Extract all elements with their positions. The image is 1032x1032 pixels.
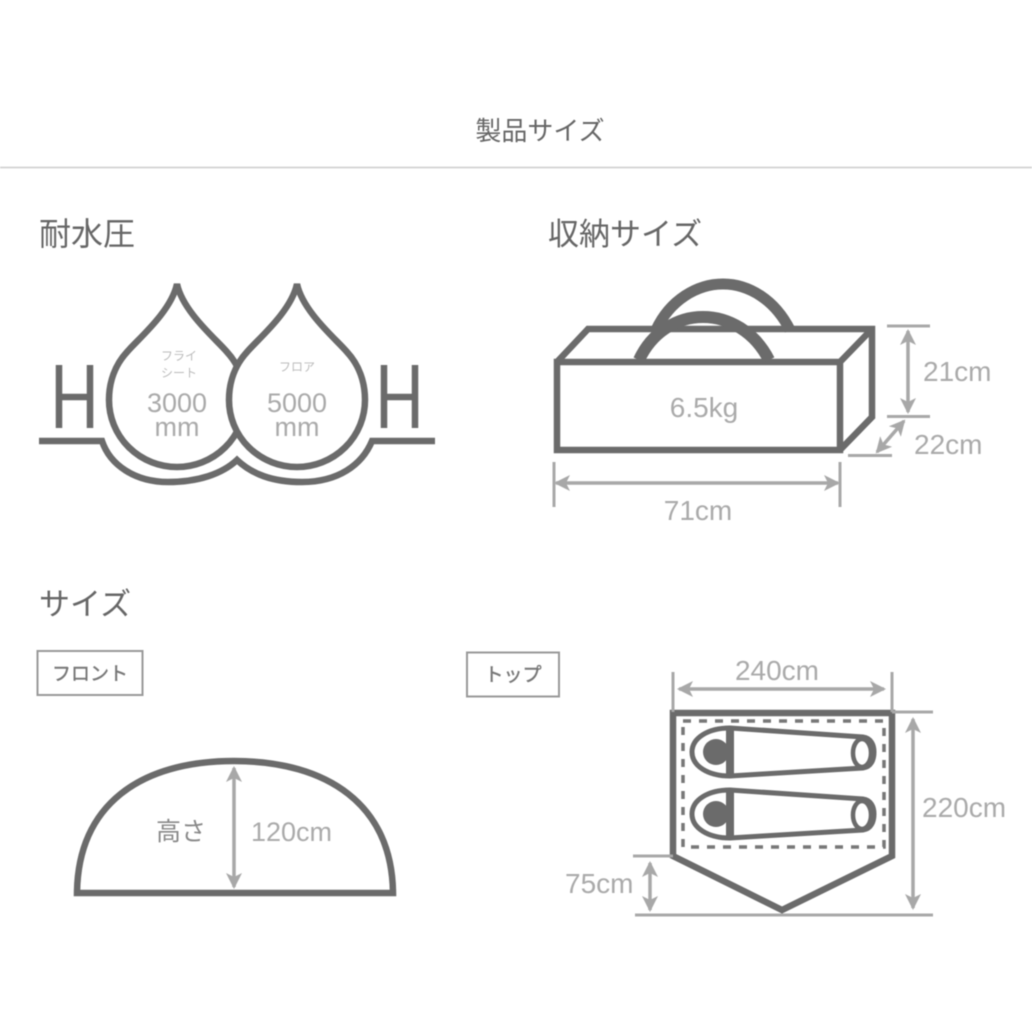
- panel: front view diagram: [77, 761, 393, 893]
- icon: bag body: [557, 329, 872, 450]
- fly sheet value: mm: [155, 412, 199, 442]
- heading: storage size: 収納サイズ: [548, 217, 702, 252]
- icon: front handle: [639, 317, 769, 360]
- icon: inner tent dashed: [683, 721, 884, 847]
- label box: top: [467, 652, 559, 696]
- panel: storage bag diagram: [554, 284, 991, 526]
- floor label: フロア: [279, 360, 315, 374]
- icon: ground line: [39, 441, 435, 482]
- depth dimension: [848, 421, 904, 456]
- icon: left H: [59, 365, 90, 428]
- height value: 120cm: [251, 817, 332, 847]
- depth dimension: [633, 712, 933, 915]
- icon: sleeping bag 2: [692, 790, 874, 838]
- icon: floor drop: [229, 284, 365, 467]
- floor value: mm: [275, 412, 319, 442]
- icon: right H: [384, 365, 415, 428]
- icon: tent outline: [673, 713, 892, 910]
- height label: 21cm: [923, 356, 991, 387]
- width label: 71cm: [664, 495, 732, 526]
- label box: front: [38, 651, 142, 695]
- icon: back handle: [656, 284, 790, 330]
- fly sheet label: フライ: [161, 349, 197, 363]
- fly sheet value: 3000: [147, 388, 207, 418]
- width label: 240cm: [735, 655, 819, 686]
- weight: 6.5kg: [670, 392, 738, 423]
- depth label: 220cm: [922, 792, 1006, 823]
- floor value: 5000: [267, 388, 327, 418]
- height label: 高さ: [156, 818, 206, 846]
- depth label: 22cm: [914, 429, 982, 460]
- heading: water resistance: 耐水圧: [39, 216, 135, 252]
- label box: top: トップ: [484, 664, 542, 686]
- panel: water resistance diagram: [39, 284, 435, 482]
- page title: 製品サイズ: [475, 116, 605, 146]
- icon: sleeping bag 1: [692, 728, 874, 776]
- width dimension: [554, 462, 840, 507]
- fly sheet label: [161, 349, 197, 380]
- label box: front: フロント: [52, 664, 128, 685]
- height dimension: [887, 326, 930, 416]
- width dimension: [673, 672, 892, 712]
- vestibule arrow: [648, 863, 652, 910]
- vestibule label: 75cm: [565, 868, 633, 899]
- fly sheet label: シート: [161, 366, 197, 380]
- fly sheet value: [147, 388, 207, 442]
- icon: fly sheet drop: [109, 284, 245, 467]
- panel: top view diagram: [565, 655, 1006, 915]
- height arrow: [232, 768, 236, 887]
- icon: tent dome: [77, 761, 393, 893]
- heading: size: サイズ: [39, 587, 131, 622]
- floor value: [267, 388, 327, 442]
